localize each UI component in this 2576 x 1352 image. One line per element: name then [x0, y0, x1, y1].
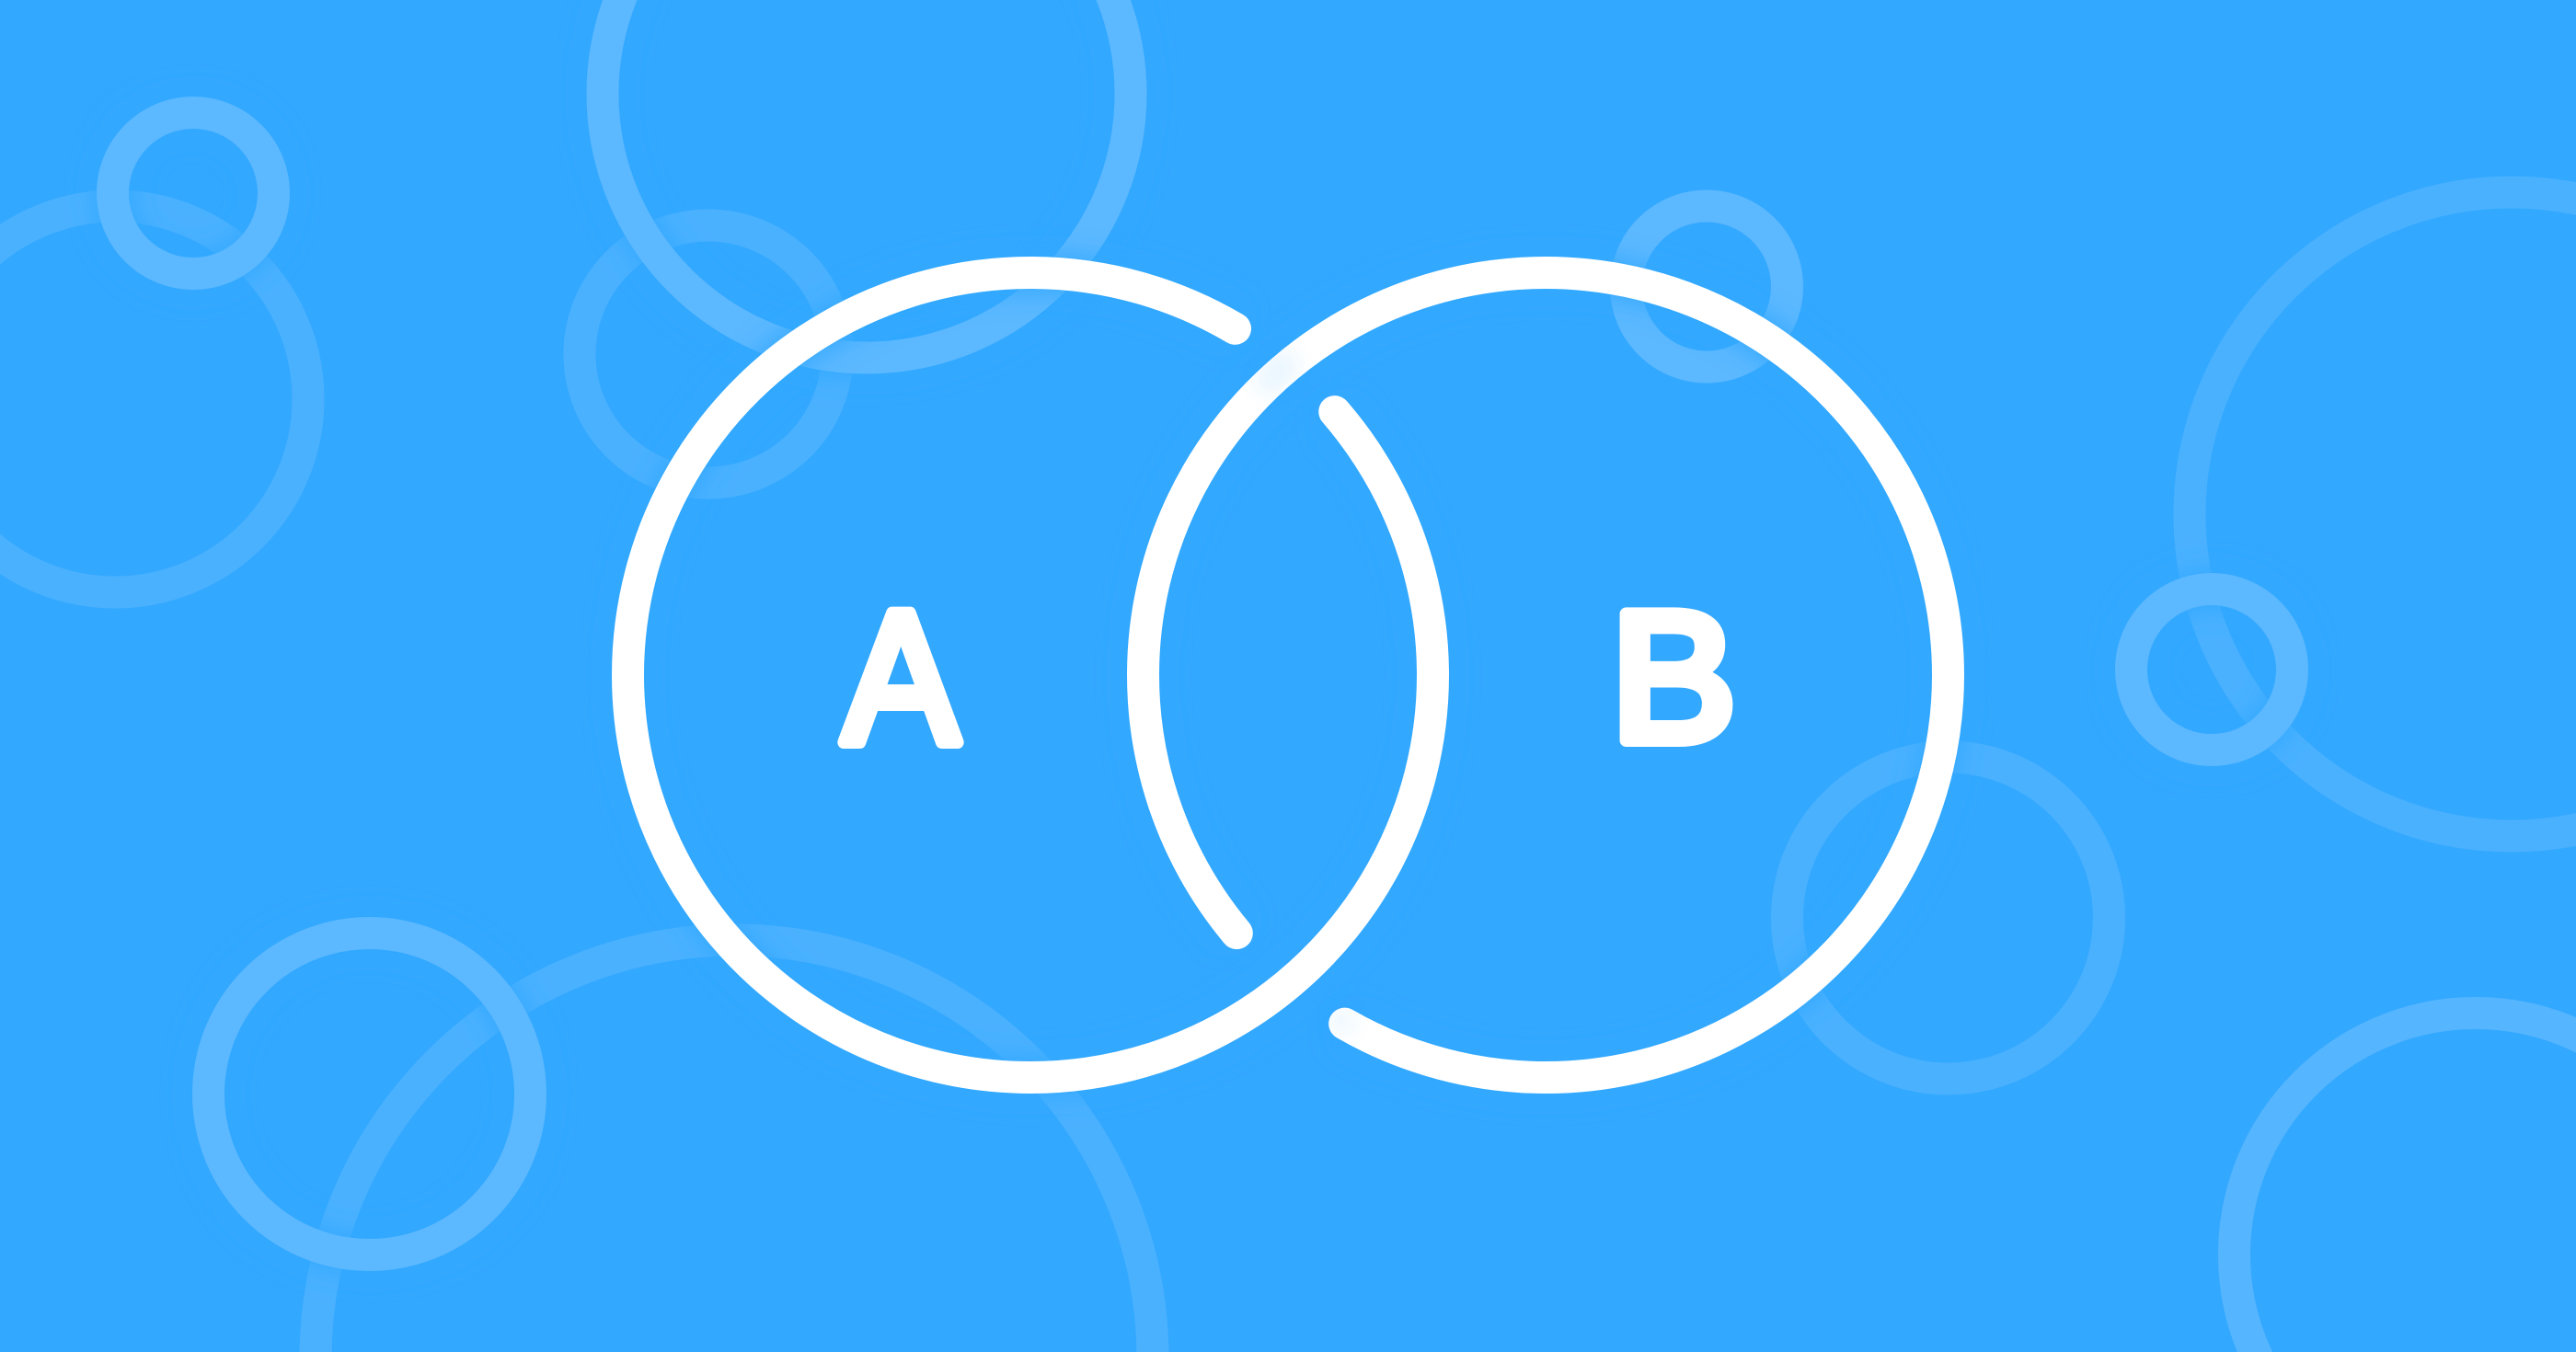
- ring: top large: [603, 0, 1131, 358]
- ring: right small: [2131, 589, 2293, 750]
- circle A arc: [627, 272, 1433, 1077]
- soft shadows of main circles: [627, 272, 1949, 1078]
- ring: top left small: [112, 112, 274, 274]
- ring: faint middle left: [580, 225, 837, 483]
- ring: faint lower right: [1787, 757, 2109, 1079]
- ring: bottom left: [208, 933, 530, 1255]
- soft highlights on circle B: [1252, 346, 1352, 1032]
- ring: medium bottom right: [2234, 1014, 2576, 1352]
- ring shadows over faint rings: [112, 0, 2293, 1255]
- ring: faint left large: [0, 206, 308, 592]
- label B: B: [1611, 574, 1736, 780]
- ring: faint right large: [2190, 192, 2576, 836]
- ring: faint bottom large: [316, 940, 1153, 1352]
- circle B arc: [1143, 273, 1949, 1078]
- label A: A: [843, 573, 959, 783]
- ring: top right small: [1627, 206, 1787, 367]
